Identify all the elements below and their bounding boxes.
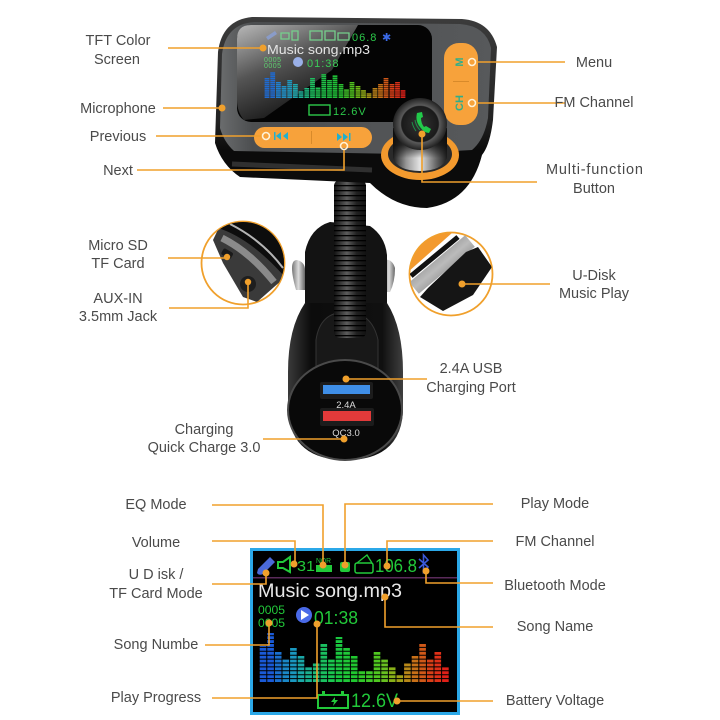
car charger — [288, 180, 403, 460]
equalizer chart — [263, 633, 445, 682]
song title: Music song.mp3 — [258, 581, 402, 602]
screen counters: 0005 — [264, 63, 282, 70]
callout: battery voltage: Battery Voltage — [506, 693, 604, 709]
callout: play mode: Play Mode — [521, 496, 589, 512]
screen status row: 06.8 — [352, 32, 377, 44]
screen battery: 12.6V — [333, 106, 367, 118]
FM icon — [355, 555, 373, 573]
metal clip left — [292, 260, 305, 290]
callout: FM channel — [384, 534, 594, 570]
EQ icon — [316, 558, 332, 572]
callout: play progress: Play Progress — [111, 690, 201, 706]
knob ring inner — [388, 135, 452, 173]
play time: 01:38 — [314, 608, 358, 628]
screen counters: 0005 — [264, 57, 282, 64]
device head — [215, 17, 497, 208]
screen counters — [264, 57, 340, 70]
callout: quick charge — [148, 422, 348, 456]
port label QC3.0: QC3.0 — [332, 428, 360, 439]
callout: song name — [382, 594, 593, 635]
lower trim — [232, 164, 372, 170]
port: red qc — [320, 408, 374, 426]
volume value: 31 — [297, 558, 315, 575]
callout: multi-function button: Button — [573, 181, 615, 197]
face panel — [220, 22, 491, 154]
charger face — [288, 360, 402, 460]
callout: volume — [132, 535, 298, 568]
callout: bluetooth mode: Bluetooth Mode — [504, 578, 606, 594]
battery icon — [318, 691, 348, 708]
song numbers: 0005 — [258, 605, 285, 617]
callout: TFT color screen — [86, 33, 266, 68]
callout: quick charge: Charging — [175, 422, 233, 438]
callout: FM channel — [468, 95, 633, 111]
callout: play progress — [111, 620, 320, 706]
callout: menu: Menu — [576, 55, 612, 71]
callout: menu — [468, 55, 612, 71]
button: menu and channel: CH — [454, 95, 466, 111]
LCD frame — [252, 550, 458, 714]
callout: USB charging port: 2.4A USB — [440, 361, 502, 377]
button: previous and next — [254, 127, 372, 148]
metal clip right — [383, 260, 395, 292]
callout: micro SD: Micro SD — [88, 238, 148, 254]
callout: song name: Song Name — [517, 619, 593, 635]
play icon — [296, 607, 312, 623]
callout: AUX-IN: AUX-IN — [93, 291, 143, 307]
inset: card and aux — [202, 215, 290, 304]
callout: U disk mode: TF Card Mode — [109, 586, 203, 602]
callout: multi-function button: Multi-function — [546, 162, 643, 178]
callout: USB charging port: Charging Port — [426, 380, 516, 396]
callout: next: Next — [103, 163, 133, 179]
callout: FM channel: FM Channel — [555, 95, 633, 111]
screen — [237, 25, 432, 122]
callout: EQ mode — [125, 497, 326, 568]
knob ring — [381, 130, 459, 180]
EQ icon: NOR — [316, 558, 331, 565]
song numbers — [258, 605, 285, 630]
usb icon — [257, 557, 275, 575]
gooseneck — [334, 180, 366, 338]
callout: microphone: Microphone — [80, 101, 156, 117]
callout: song number: Song Numbe — [114, 637, 198, 653]
charger upper body — [305, 222, 387, 305]
enlarged LCD screen — [252, 550, 458, 714]
port: blue usb — [320, 382, 373, 399]
callout: microphone — [80, 101, 226, 117]
callout: previous: Previous — [90, 129, 146, 145]
callout: TFT color screen: Screen — [94, 52, 140, 68]
screen battery — [309, 105, 367, 118]
button: menu and channel: M — [454, 57, 466, 67]
charger lower body — [288, 303, 403, 460]
screen status row: ✱ — [382, 32, 391, 44]
callout: TFT color screen: TFT Color — [86, 33, 151, 49]
knob — [393, 128, 447, 171]
play mode icon — [340, 562, 350, 572]
song numbers: 0005 — [258, 618, 285, 630]
callout: battery voltage — [394, 693, 604, 709]
callout: U-Disk — [458, 268, 630, 302]
callout: song number — [114, 620, 272, 653]
FM frequency: 106.8 — [375, 556, 417, 576]
callout: play mode — [342, 496, 589, 568]
volume icon — [278, 557, 290, 572]
callout: FM channel: FM Channel — [516, 534, 594, 550]
inset: u-disk — [404, 225, 492, 316]
callout: micro SD — [88, 238, 230, 272]
screen counters: 01:38 — [307, 58, 340, 70]
callout: U disk mode: U D isk / — [129, 567, 184, 583]
screen equalizer — [267, 72, 403, 98]
callout: bluetooth mode — [422, 568, 606, 594]
callout: EQ mode: EQ Mode — [125, 497, 187, 513]
callout: U disk mode — [109, 567, 270, 602]
callout: AUX-IN: 3.5mm Jack — [79, 309, 158, 325]
neck collar — [316, 312, 378, 372]
phone icon — [412, 112, 431, 133]
screen gloss — [237, 25, 358, 120]
callout: multi-function button — [418, 130, 643, 197]
body shell — [215, 17, 497, 208]
bluetooth icon — [419, 555, 428, 572]
callout: next — [103, 142, 348, 179]
callout: USB charging port — [342, 361, 516, 396]
battery voltage: 12.6V — [351, 691, 398, 712]
callout: quick charge: Quick Charge 3.0 — [148, 440, 260, 456]
callout: AUX-IN — [79, 279, 251, 325]
callout: U-Disk: Music Play — [559, 286, 630, 302]
knob top — [393, 98, 447, 150]
screen title: Music song.mp3 — [267, 43, 370, 57]
callout: micro SD: TF Card — [91, 256, 145, 272]
port label 2.4A: 2.4A — [336, 400, 356, 411]
status divider — [253, 577, 457, 578]
callout: previous — [90, 129, 270, 145]
callout: volume: Volume — [132, 535, 180, 551]
button: menu and channel — [444, 43, 478, 125]
callout: U-Disk: U-Disk — [572, 268, 616, 284]
screen status row — [266, 31, 391, 44]
